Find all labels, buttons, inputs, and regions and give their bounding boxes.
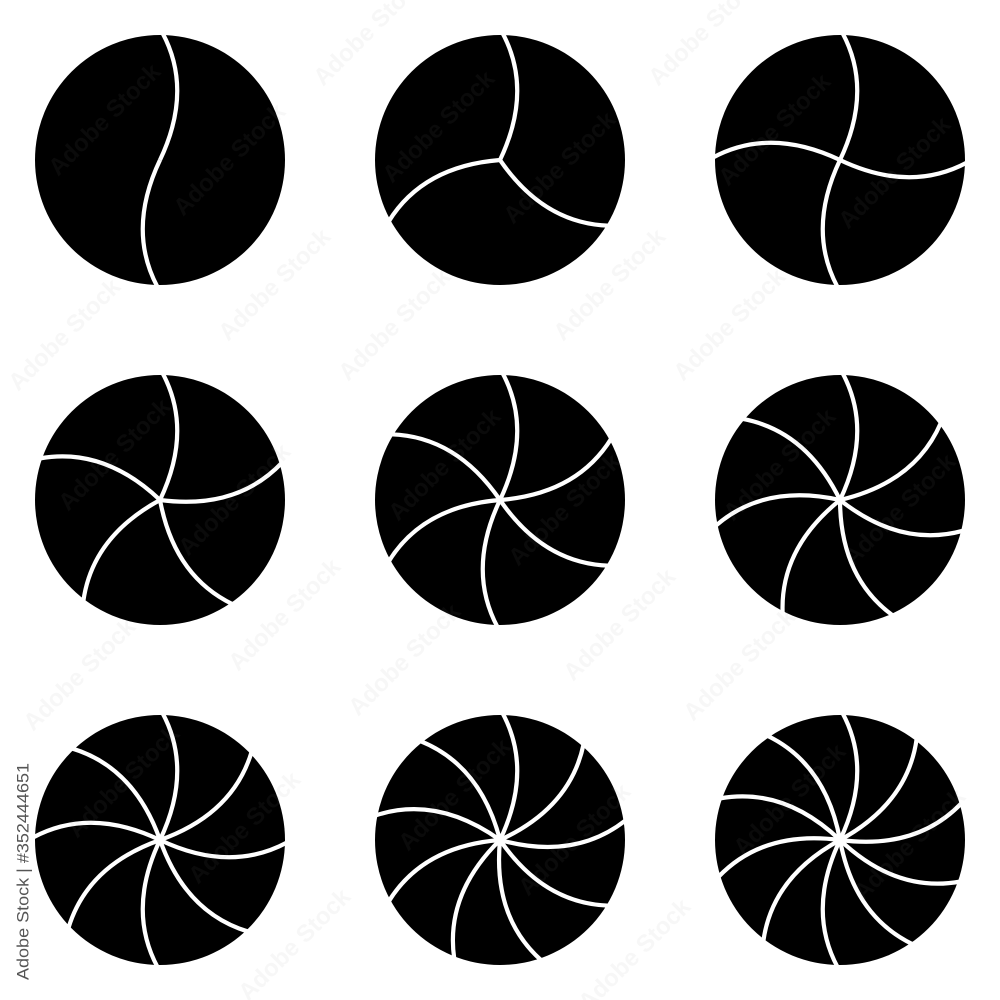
watermark: repeated stock text: Adobe Stock bbox=[838, 448, 962, 571]
watermark: repeated stock text: Adobe Stock bbox=[43, 58, 167, 181]
watermark: repeated stock text: Adobe Stock bbox=[183, 766, 307, 889]
icon: circle with 9 segments bbox=[375, 713, 628, 965]
watermark: repeated stock text: Adobe Stock bbox=[223, 553, 347, 676]
icon: circle with 2 segments bbox=[35, 33, 285, 287]
watermark: repeated stock text: Adobe Stock bbox=[62, 720, 186, 843]
watermark: repeated stock text: Adobe Stock bbox=[513, 778, 637, 901]
icon: circle with 6 segments bbox=[375, 373, 625, 627]
watermark: repeated stock text: Adobe Stock bbox=[718, 403, 842, 526]
icon: circle with 8 segments bbox=[33, 713, 287, 967]
watermark: repeated stock text: Adobe Stock bbox=[377, 65, 501, 188]
watermark: repeated stock text: Adobe Stock bbox=[498, 106, 622, 229]
watermark: repeated stock text: Adobe Stock bbox=[678, 603, 802, 726]
watermark: repeated stock text: Adobe Stock bbox=[728, 738, 852, 861]
watermark: repeated stock text: Adobe Stock bbox=[53, 393, 177, 516]
watermark: repeated stock text: Adobe Stock bbox=[503, 448, 627, 571]
watermark: repeated stock text: Adobe Stock bbox=[713, 68, 837, 191]
watermark: repeated stock text: Adobe Stock bbox=[393, 733, 517, 856]
icon: circle with 3 segments bbox=[375, 33, 625, 285]
watermark: repeated stock text: Adobe Stock bbox=[3, 273, 127, 396]
watermark: repeated stock text: Adobe Stock bbox=[848, 783, 972, 906]
watermark: repeated stock text: Adobe Stock bbox=[383, 403, 507, 526]
watermark: repeated stock text: Adobe Stock bbox=[833, 111, 957, 234]
icon: circle with 4 segments bbox=[713, 33, 967, 287]
watermark: repeated stock text: Adobe Stock bbox=[213, 223, 337, 346]
watermark: repeated stock text: Adobe Stock bbox=[343, 598, 467, 721]
watermark: repeated stock text: Adobe Stock bbox=[168, 98, 292, 221]
vertical stock id text: Adobe Stock | #352444651 bbox=[14, 763, 32, 980]
watermark: repeated stock text: Adobe Stock bbox=[333, 263, 457, 386]
icon: circle with 10 segments bbox=[714, 713, 966, 967]
watermark: repeated stock text: Adobe Stock bbox=[548, 223, 672, 346]
icon: circle with 7 segments bbox=[712, 373, 965, 625]
watermark: repeated stock text: Adobe Stock bbox=[558, 563, 682, 686]
watermark: repeated stock text: Adobe Stock bbox=[668, 263, 792, 386]
watermark: repeated stock text: Adobe Stock bbox=[173, 438, 297, 561]
watermark: repeated stock text: Adobe Stock bbox=[18, 613, 142, 736]
icon: circle with 5 segments bbox=[35, 373, 286, 625]
